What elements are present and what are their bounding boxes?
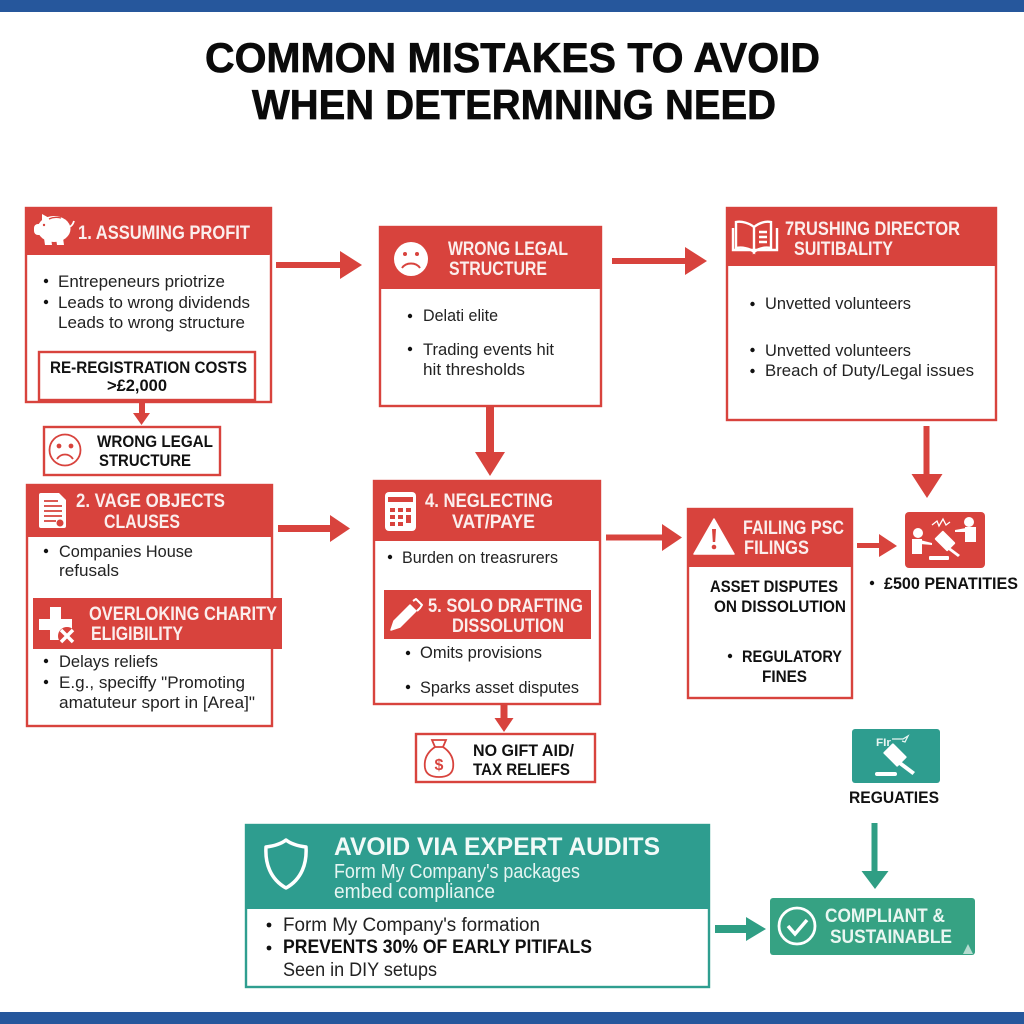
bullet list (408, 306, 554, 379)
callout: wrong legal structure: WRONG LEGAL (97, 432, 213, 451)
heading: AVOID VIA EXPERT AUDITS (334, 833, 660, 861)
heading (76, 491, 225, 533)
banner: 5. solo drafting dissolution: 5. SOLO DRAFTING (428, 596, 583, 617)
heading: VAT/PAYE (452, 512, 535, 533)
text: asset disputes: ASSET DISPUTES (710, 577, 838, 596)
callout: re-registration costs: RE-REGISTRATION COSTS (50, 358, 247, 377)
text: £500 penalties: £500 PENATITIES (884, 574, 1018, 593)
banner: 5. solo drafting dissolution (384, 590, 591, 639)
arrow: legal structure to neglecting vat (475, 406, 505, 476)
title: WHEN DETERMNING NEED (252, 81, 776, 128)
bullet list: Form My Company's formation (283, 915, 540, 936)
bullet list: provisions: Omits provisions (420, 643, 542, 662)
text: regulatory fines (728, 647, 843, 686)
bullet list: provisions (406, 643, 579, 697)
title: COMMON MISTAKES TO AVOID (205, 34, 820, 81)
icon: regulators gavel (852, 729, 940, 783)
subheading (334, 861, 580, 903)
bullet list: Burden on treasrurers (402, 548, 558, 567)
arrow: audits to compliant (715, 917, 766, 941)
bullet list: hit thresholds (423, 360, 525, 379)
panel: 7. rushing director suitability (726, 207, 997, 420)
arrow: profit to wrong legal structure (133, 400, 150, 425)
bullet list: reliefs: E.g., speciffy "Promoting (59, 673, 245, 692)
callout: re-registration costs (39, 352, 255, 400)
label: regulators: REGUATIES (849, 788, 939, 807)
heading (785, 219, 960, 260)
heading: 2. VAGE OBJECTS (76, 491, 225, 512)
bullet list: Leads to wrong dividends (58, 293, 250, 312)
callout: wrong legal structure (44, 427, 220, 475)
heading: 1. ASSUMING PROFIT (78, 223, 250, 244)
icon: pencil (391, 599, 422, 630)
heading: STRUCTURE (449, 259, 547, 280)
arrow: legal structure to director suitability (612, 247, 707, 275)
subheading: embed compliance (334, 881, 495, 903)
icon: money bag (425, 740, 453, 777)
icon: sad face (50, 434, 80, 466)
bullet list (44, 272, 250, 332)
bullet list: Leads to wrong structure (58, 313, 245, 332)
banner: overlooking charity eligibility: ELIGIBILITY (91, 624, 183, 645)
bullet list (267, 915, 592, 981)
icon: penalties gavel (905, 512, 985, 568)
heading (448, 239, 568, 280)
arrow: solo drafting to no gift aid (494, 704, 514, 732)
callout: no gift aid / tax reliefs: NO GIFT AID/ (473, 741, 574, 760)
icon: check circle (779, 908, 815, 944)
bullet list (750, 294, 974, 380)
bullet list: Breach of Duty/Legal issues (765, 361, 974, 380)
bullet list (44, 542, 193, 580)
heading: FAILING PSC (743, 518, 844, 539)
heading (425, 491, 553, 533)
icon: piggy bank (34, 214, 74, 245)
bullet list: Companies House (59, 542, 193, 561)
callout: no gift aid / tax reliefs (416, 734, 595, 782)
bullet list: reliefs: Delays reliefs (59, 652, 158, 671)
banner: overlooking charity eligibility: OVERLOKING CHARITY (89, 604, 277, 625)
icon: document (39, 493, 66, 528)
icon: calculator (385, 492, 416, 531)
bullet list: reliefs (44, 652, 255, 712)
bullet list: refusals (59, 561, 119, 580)
arrow: vague objects to neglecting vat (278, 515, 350, 542)
icon: sad face solid (394, 242, 428, 276)
heading: SUITIBALITY (794, 239, 893, 260)
icon: shield (266, 840, 306, 888)
icon: warning triangle (694, 519, 734, 554)
icon: regulators gavel: FIr (876, 737, 892, 749)
callout: no gift aid / tax reliefs: TAX RELIEFS (473, 760, 570, 779)
heading: WRONG LEGAL (448, 239, 568, 260)
icon: money bag: $ (435, 757, 444, 774)
text: regulatory fines: REGULATORY (742, 647, 843, 666)
bullet list: reliefs: amatuteur sport in [Area]" (59, 693, 255, 712)
arrow: psc filings to penalties (857, 534, 897, 557)
panel: 2. vague objects clauses (26, 484, 282, 726)
heading: 7RUSHING DIRECTOR (785, 219, 960, 240)
title (205, 34, 820, 128)
bullet list: PREVENTS 30% OF EARLY PITIFALS (283, 937, 592, 958)
arrow: regulators to compliant (862, 823, 888, 889)
panel: wrong legal structure (379, 226, 601, 406)
bullet list: Unvetted volunteers (765, 294, 911, 313)
text: asset disputes: ON DISSOLUTION (714, 597, 846, 616)
text: asset disputes (710, 577, 846, 616)
heading (743, 518, 844, 559)
banner: overlooking charity eligibility (33, 598, 282, 649)
heading: 4. NEGLECTING (425, 491, 553, 512)
bullet list: Entrepeneurs priotrize (58, 272, 225, 291)
panel: 1. assuming profit (25, 207, 271, 402)
panel: compliant and sustainable: SUSTAINABLE (830, 927, 952, 948)
panel: 4. neglecting vat/paye (373, 480, 601, 704)
arrow: neglecting vat to psc filings (606, 524, 682, 551)
callout: wrong legal structure: STRUCTURE (99, 451, 191, 470)
text: regulatory fines: FINES (762, 667, 807, 686)
icon: open book (733, 222, 777, 252)
bullet list: Seen in DIY setups (283, 960, 437, 981)
callout: re-registration costs: >£2,000 (107, 376, 167, 395)
bullet list: Delati elite (423, 306, 498, 325)
heading: CLAUSES (104, 512, 180, 533)
bullet list: Trading events hit (423, 340, 554, 359)
panel: avoid via expert audits (245, 824, 710, 987)
panel: failing psc filings (687, 508, 853, 698)
panel: compliant and sustainable: COMPLIANT & (825, 906, 945, 927)
subheading: Form My Company's packages (334, 861, 580, 883)
icon: cross with x (39, 607, 76, 645)
bullet list: provisions: Sparks asset disputes (420, 678, 579, 697)
arrow: profit to wrong legal structure panel (276, 251, 362, 279)
heading: FILINGS (744, 538, 809, 559)
bullet list: Unvetted volunteers (765, 341, 911, 360)
arrow: director suitability to penalties (912, 426, 942, 498)
banner: 5. solo drafting dissolution: DISSOLUTION (452, 616, 564, 637)
panel: compliant and sustainable (770, 898, 975, 955)
